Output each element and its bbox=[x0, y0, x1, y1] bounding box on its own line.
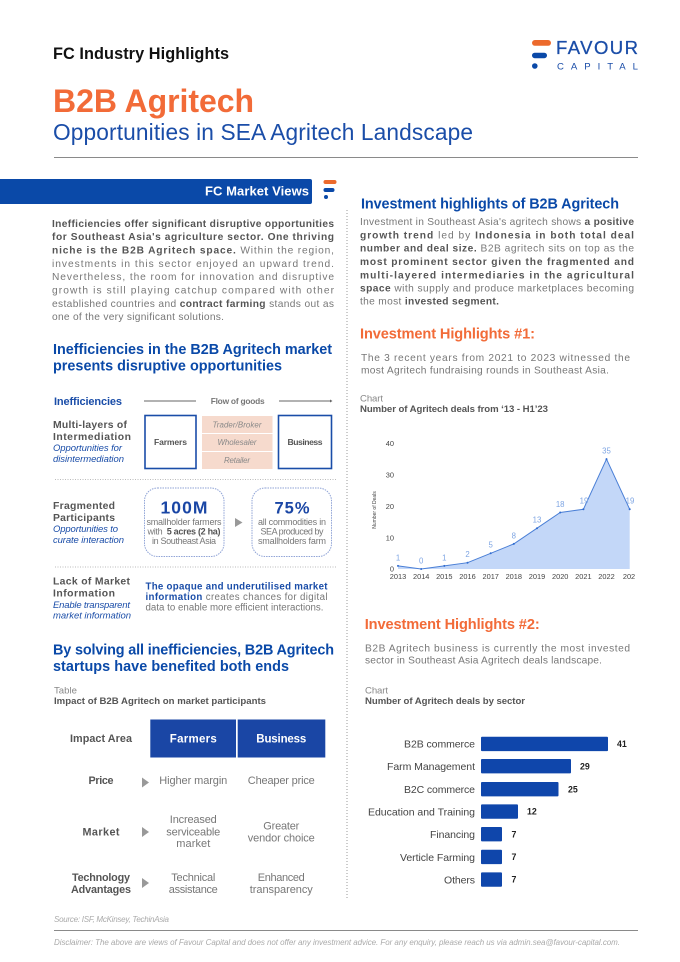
row: multi-layers label: disintermediation bbox=[53, 454, 124, 465]
row: multi-layers label: Intermediation bbox=[53, 432, 131, 443]
area chart: agritech deals by year: 13 bbox=[533, 516, 541, 525]
area chart: agritech deals by year: 1 bbox=[442, 553, 446, 562]
logo: Favour Capital: FAVOUR bbox=[556, 37, 638, 58]
bar chart: deals by sector: 7 bbox=[512, 852, 516, 862]
area chart: agritech deals by year: 0 bbox=[390, 565, 394, 574]
table: impact on market participants: serviceable bbox=[166, 826, 220, 838]
heading: investment highlights: Investment highlights of B2B Agritech bbox=[361, 196, 619, 212]
row: lack of information label: Information bbox=[53, 588, 115, 599]
subtitle: Opportunities in SEA Agritech Landscape bbox=[53, 119, 473, 145]
text block: opaque information: The opaque and underutilised market bbox=[146, 581, 328, 592]
text block: investment highlights: the most invested segment. bbox=[360, 297, 499, 308]
heading: solving inefficiencies: startups have benefited both ends bbox=[53, 659, 289, 675]
bar chart: deals by sector: 7 bbox=[512, 875, 516, 885]
table: impact on market participants: Impact Area bbox=[70, 733, 133, 745]
box: farmers: Farmers bbox=[154, 437, 187, 447]
table: impact on market participants: Technology bbox=[72, 872, 130, 884]
heading: inefficiencies bbox=[53, 342, 332, 374]
title: B2B Agritech bbox=[53, 83, 254, 119]
chart caption: deals by sector: Chart bbox=[365, 685, 388, 696]
text block: market views intro: Inefficiencies offer significant disruptive opportunities bbox=[52, 219, 334, 230]
stat card: 75%: SEA produced by bbox=[260, 526, 324, 536]
chart caption: deals by year: Chart bbox=[360, 393, 383, 404]
logo: Favour Capital: CAPITAL bbox=[557, 62, 639, 72]
header label: FC Industry Highlights bbox=[53, 45, 229, 63]
area chart: agritech deals by year: 0 bbox=[419, 556, 424, 565]
stat card: 75% bbox=[252, 488, 332, 556]
bar chart: deals by sector: 41 bbox=[617, 739, 627, 749]
table: impact on market participants: Higher margin bbox=[159, 775, 227, 787]
area chart: agritech deals by year: 2021 bbox=[575, 572, 592, 581]
row: fragmented label bbox=[53, 501, 124, 546]
area chart: agritech deals by year: 20 bbox=[386, 502, 394, 511]
table: impact on market participants: Increased bbox=[170, 814, 217, 826]
text block: market views intro: established countries and contract farming stands out as bbox=[52, 299, 334, 310]
area chart: agritech deals by year: 2018 bbox=[506, 572, 522, 581]
intermediaries: Retailer bbox=[224, 456, 250, 465]
intermediaries bbox=[202, 416, 272, 469]
chart caption: deals by year bbox=[360, 393, 548, 415]
text block: market views intro: niche is the B2B Agritech space. Within the region, bbox=[52, 246, 334, 257]
flow of goods header: Inefficiencies bbox=[54, 396, 122, 408]
bar chart: deals by sector: Education and Training bbox=[368, 806, 475, 818]
box: business bbox=[278, 416, 332, 468]
area chart: agritech deals by year: 18 bbox=[556, 500, 565, 509]
bar chart: deals by sector: B2B commerce bbox=[404, 738, 475, 750]
heading: solving inefficiencies: By solving all inefficiencies, B2B Agritech bbox=[53, 642, 334, 658]
box: farmers bbox=[145, 416, 196, 468]
row: lack of information label bbox=[53, 576, 131, 622]
text block: investment highlights: space with supply and produce marketplaces becoming bbox=[360, 284, 634, 295]
text block: highlight 2: B2B Agritech business is currently the most invested bbox=[365, 643, 630, 654]
area chart: agritech deals by year: 10 bbox=[386, 533, 394, 542]
table: impact on market participants: Price bbox=[88, 775, 114, 787]
heading: investment highlights 2: Investment Highlights #2: bbox=[365, 617, 540, 633]
table: impact on market participants: assistance bbox=[169, 884, 218, 896]
chart caption: deals by year: Number of Agritech deals from ‘13 - H1’23 bbox=[360, 404, 548, 415]
row: lack of information label: Lack of Market bbox=[53, 576, 131, 587]
table: impact on market participants: Greater bbox=[263, 821, 300, 833]
heading: solving inefficiencies bbox=[53, 642, 334, 675]
bar chart: deals by sector: 7 bbox=[512, 829, 516, 839]
text block: investment highlights: most prominent sector given the fragmented and bbox=[360, 257, 634, 268]
heading: inefficiencies: Inefficiencies in the B2B Agritech market bbox=[53, 342, 332, 358]
text block: market views intro: investments in this sector enjoyed an upward trend. bbox=[52, 259, 334, 270]
row: fragmented label: Fragmented bbox=[53, 501, 115, 512]
row: lack of information label: market information bbox=[53, 610, 131, 622]
text block: market views intro: growth is still playing catchup compared with other bbox=[52, 286, 335, 297]
text block: highlight 1: most Agritech fundraising rounds in Southeast Asia. bbox=[361, 365, 609, 376]
heading: inefficiencies: presents disruptive opportunities bbox=[53, 358, 282, 374]
stat card: 75%: 75% bbox=[274, 500, 310, 518]
area chart: agritech deals by year: 2014 bbox=[413, 572, 429, 581]
bar chart: deals by sector: Financing bbox=[430, 829, 475, 841]
row: multi-layers label bbox=[53, 420, 131, 465]
table: impact on market participants: vendor choice bbox=[248, 833, 315, 845]
disclaimer: Disclaimer: The above are views of Favour Capital and does not offer any investment advice. For any enquiry, please reach us via admin.sea@favour-capital.com. bbox=[54, 938, 620, 947]
table: impact on market participants: Enhanced bbox=[258, 872, 305, 884]
area chart: agritech deals by year: 5 bbox=[489, 541, 494, 550]
flow of goods header bbox=[54, 396, 332, 408]
stat card: 75%: smallholders farm bbox=[258, 536, 326, 546]
text block: market views intro bbox=[52, 219, 335, 323]
chart caption: deals by sector bbox=[365, 685, 525, 707]
text block: opaque information: information creates chances for digital bbox=[146, 592, 328, 603]
area chart: agritech deals by year: 2020 bbox=[552, 572, 568, 581]
row: multi-layers label: Multi-layers of bbox=[53, 420, 128, 431]
chart caption: deals by sector: Number of Agritech deals by sector bbox=[365, 696, 525, 707]
bar chart: deals by sector: Others bbox=[444, 874, 475, 886]
area chart: agritech deals by year: 2022 bbox=[598, 572, 615, 581]
bar chart: deals by sector: Farm Management bbox=[387, 761, 475, 773]
row: lack of information label: Enable transparent bbox=[53, 600, 130, 611]
stat card: 75%: all commodities in bbox=[258, 517, 326, 527]
bar chart: deals by sector: 29 bbox=[580, 761, 590, 771]
intermediaries: Wholesaler bbox=[218, 438, 257, 447]
table: impact on market participants: transparency bbox=[250, 884, 313, 896]
text block: highlight 2: sector in Southeast Asia Agritech deals landscape. bbox=[365, 655, 602, 666]
stat card: 100M: 100M bbox=[160, 498, 208, 518]
arrow bbox=[235, 518, 242, 527]
banner: FC Market Views bbox=[0, 179, 312, 204]
logo: Favour Capital bbox=[532, 37, 639, 72]
banner: FC Market Views: FC Market Views bbox=[205, 184, 309, 199]
table caption: Table bbox=[54, 685, 77, 696]
stat card: 100M: in Southeast Asia bbox=[152, 536, 216, 546]
area chart: agritech deals by year: 202 bbox=[623, 572, 635, 581]
area chart: agritech deals by year: 19 bbox=[626, 497, 634, 506]
area chart: agritech deals by year: Number of Deals bbox=[372, 491, 378, 529]
table: impact on market participants: Market bbox=[82, 826, 120, 838]
flow of goods header: Flow of goods bbox=[211, 396, 265, 406]
area chart: agritech deals by year bbox=[372, 439, 635, 581]
table: impact on market participants: Technical bbox=[171, 872, 215, 884]
area chart: agritech deals by year: 1 bbox=[396, 553, 400, 562]
area chart: agritech deals by year: 19 bbox=[580, 497, 588, 506]
bar chart: deals by sector: 25 bbox=[568, 784, 578, 794]
area chart: agritech deals by year: 2016 bbox=[459, 572, 476, 581]
area chart: agritech deals by year: 2017 bbox=[482, 572, 499, 581]
source: Source: ISF, McKinsey, TechinAsia bbox=[54, 915, 170, 924]
table caption bbox=[54, 685, 266, 707]
table: impact on market participants: Advantages bbox=[71, 884, 131, 896]
area chart: agritech deals by year: 2015 bbox=[436, 572, 453, 581]
intermediaries: Trader/Broker bbox=[212, 420, 262, 430]
text block: highlight 2 bbox=[365, 643, 630, 666]
stat card: 100M: with 5 acres (2 ha) bbox=[146, 526, 220, 536]
text block: highlight 1: The 3 recent years from 2021 to 2023 witnessed the bbox=[361, 353, 630, 364]
table: impact on market participants: Cheaper price bbox=[248, 775, 315, 787]
row: multi-layers label: Opportunities for bbox=[53, 443, 123, 454]
table: impact on market participants bbox=[70, 720, 325, 896]
icon: small logo bbox=[324, 180, 336, 199]
row: fragmented label: Participants bbox=[53, 513, 115, 524]
bar chart: deals by sector: Verticle Farming bbox=[400, 852, 475, 864]
stat card: 100M: smallholder farmers bbox=[146, 517, 222, 527]
box: business: Business bbox=[288, 437, 323, 447]
table caption: Impact of B2B Agritech on market participants bbox=[54, 696, 266, 707]
text block: opaque information bbox=[146, 581, 328, 614]
table: impact on market participants: market bbox=[176, 838, 210, 850]
text block: market views intro: Nevertheless, the room for innovation and disruptive bbox=[52, 272, 334, 283]
row: fragmented label: Opportunities to bbox=[53, 524, 118, 535]
area chart: agritech deals by year: 35 bbox=[602, 446, 611, 456]
area chart: agritech deals by year: 8 bbox=[512, 531, 516, 540]
text block: investment highlights: Investment in Southeast Asia's agritech shows a positive bbox=[360, 217, 634, 228]
table: impact on market participants: Farmers bbox=[170, 734, 217, 746]
stat card: 100M bbox=[144, 488, 224, 556]
heading: investment highlights 1: Investment Highlights #1: bbox=[360, 327, 535, 343]
text block: highlight 1 bbox=[361, 353, 630, 376]
bar chart: deals by sector bbox=[368, 737, 627, 887]
row: fragmented label: curate interaction bbox=[53, 535, 124, 546]
bar chart: deals by sector: 12 bbox=[527, 807, 537, 817]
area chart: agritech deals by year: 40 bbox=[386, 439, 394, 448]
text block: opaque information: data to enable more efficient interactions. bbox=[146, 603, 324, 614]
area chart: agritech deals by year: 2013 bbox=[390, 572, 406, 581]
text block: market views intro: one of the very significant solutions. bbox=[52, 312, 224, 323]
text block: market views intro: for Southeast Asia's agriculture sector. One thriving bbox=[52, 232, 334, 243]
area chart: agritech deals by year: 2 bbox=[465, 550, 470, 559]
text block: investment highlights bbox=[360, 217, 634, 308]
area chart: agritech deals by year: 30 bbox=[386, 471, 394, 480]
text block: investment highlights: multi-layered intermediaries in the agricultural bbox=[360, 270, 634, 281]
table: impact on market participants: Business bbox=[256, 734, 306, 746]
text block: investment highlights: growth trend led by Indonesia in both total deal bbox=[360, 230, 634, 241]
area chart: agritech deals by year: 2019 bbox=[529, 572, 545, 581]
bar chart: deals by sector: B2C commerce bbox=[404, 784, 475, 796]
text block: investment highlights: number and deal size. B2B agritech sits on top as the bbox=[360, 244, 634, 255]
